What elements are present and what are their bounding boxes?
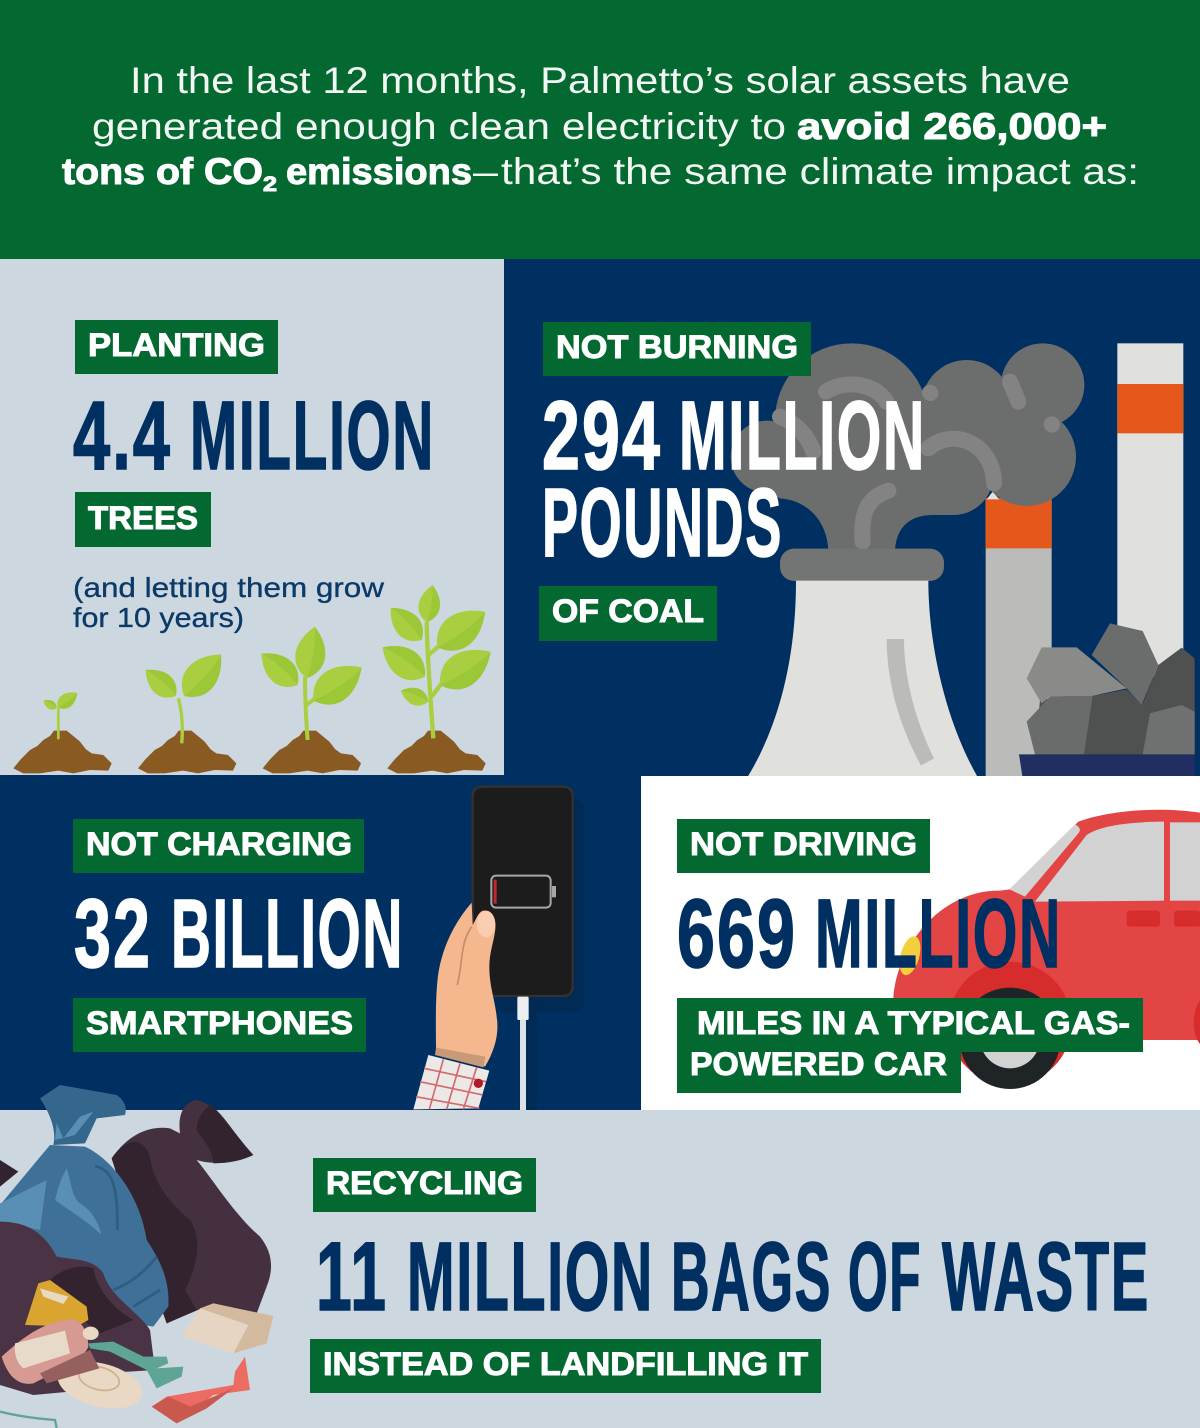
label: not driving bbox=[677, 819, 930, 873]
headline: 32 billion: BILLION bbox=[171, 879, 404, 988]
label: instead of landfilling it bbox=[310, 1339, 821, 1393]
label: trees: TREES bbox=[88, 500, 198, 536]
label: not driving: NOT DRIVING bbox=[690, 826, 917, 862]
label: recycling: RECYCLING bbox=[326, 1165, 523, 1201]
headline: 4.4 million: MILLION bbox=[190, 381, 435, 490]
label: miles in a typical gas-powered car: POWERED CAR bbox=[690, 1046, 947, 1082]
headline: 669 million bbox=[677, 879, 1062, 988]
headline: 294 million pounds: POUNDS bbox=[542, 468, 783, 577]
panel: recycling bbox=[0, 1085, 1200, 1428]
headline: 294 million pounds: 294 bbox=[542, 381, 662, 490]
headline: 11 million bags of waste: BAGS bbox=[671, 1222, 832, 1331]
label: recycling bbox=[313, 1158, 536, 1212]
label: not burning bbox=[543, 322, 811, 376]
header text: In the last 12 months, Palmetto’s solar assets have bbox=[130, 60, 1070, 101]
header text: 2 bbox=[263, 173, 277, 196]
note text: (and letting them grow bbox=[73, 572, 385, 603]
icon: phone with low battery in hand bbox=[413, 787, 584, 1110]
label: smartphones: SMARTPHONES bbox=[86, 1005, 353, 1041]
panel: not charging smartphones bbox=[0, 775, 641, 1111]
headline: 294 million pounds: MILLION bbox=[679, 381, 926, 490]
header text: avoid 266,000+ bbox=[797, 106, 1107, 147]
label: instead of landfilling it: INSTEAD OF LANDFILLING IT bbox=[323, 1346, 808, 1382]
icon: garbage bags bbox=[0, 1085, 273, 1428]
headline: 32 billion: 32 bbox=[74, 879, 152, 988]
headline: 11 million bags of waste: OF bbox=[848, 1222, 922, 1331]
label: not burning: NOT BURNING bbox=[556, 329, 798, 365]
label: of coal bbox=[539, 586, 717, 641]
label: not charging bbox=[73, 819, 364, 873]
icon: red car bbox=[893, 810, 1200, 1089]
headline: 4.4 million bbox=[73, 381, 435, 490]
note text: for 10 years) bbox=[73, 602, 244, 633]
panel: not burning coal bbox=[504, 259, 1200, 778]
icon: power plant with smoke and coal bbox=[731, 343, 1195, 778]
headline: 32 billion bbox=[74, 879, 404, 988]
panel: header bbox=[0, 0, 1200, 259]
headline: 669 million: 669 bbox=[677, 879, 797, 988]
header text: generated enough clean electricity to bbox=[92, 106, 786, 147]
headline: 11 million bags of waste bbox=[316, 1222, 1150, 1331]
panel: not driving bbox=[641, 776, 1200, 1111]
headline: 4.4 million: 4.4 bbox=[73, 381, 172, 490]
label: planting: PLANTING bbox=[88, 327, 265, 363]
header text: tons of CO bbox=[62, 151, 263, 192]
header text: — bbox=[473, 151, 498, 192]
label: miles in a typical gas-powered car: MILES IN A TYPICAL GAS- bbox=[697, 1005, 1130, 1041]
header text: that’s the same climate impact as: bbox=[501, 151, 1139, 192]
label: trees bbox=[75, 492, 211, 547]
note text bbox=[73, 572, 385, 633]
label: smartphones bbox=[73, 998, 366, 1052]
header text bbox=[62, 60, 1139, 196]
label: miles in a typical gas-powered car bbox=[677, 998, 1143, 1093]
headline: 11 million bags of waste: 11 bbox=[316, 1222, 388, 1331]
label: not charging: NOT CHARGING bbox=[86, 826, 352, 862]
label: of coal: OF COAL bbox=[552, 593, 704, 629]
icon: growing seedlings bbox=[13, 583, 500, 773]
headline: 11 million bags of waste: MILLION bbox=[407, 1222, 654, 1331]
label: planting bbox=[75, 320, 278, 374]
panel: planting trees bbox=[0, 259, 504, 776]
header text: emissions bbox=[286, 151, 472, 192]
headline: 294 million pounds bbox=[542, 381, 926, 577]
